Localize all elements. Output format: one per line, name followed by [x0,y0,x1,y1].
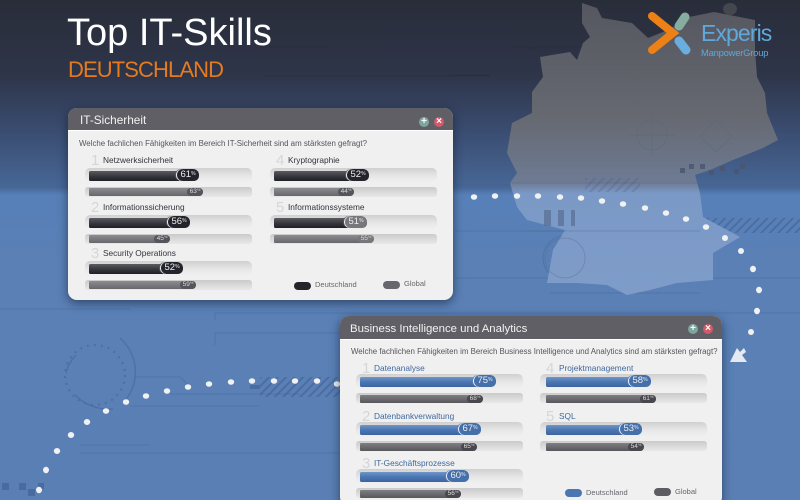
skill row 1: 68% [470,394,480,402]
question text: Welche fachlichen Fähigkeiten im Bereich IT-Sicherheit sind am stärksten gefragt? [79,139,367,148]
skill row 5: 54% [631,442,641,450]
panel heading [340,316,722,340]
skill row 5: 55% [361,234,371,242]
skill row 2: Datenbankverwaltung [374,411,454,421]
icon: plus button [688,324,698,334]
title: Top IT-Skills [67,12,272,54]
skill row 3: IT-Geschäftsprozesse [374,458,455,468]
skill row 4: Kryptographie [288,155,340,165]
skill row 2: Informationssicherung [103,202,185,212]
skill row 3: 52% [164,262,180,273]
skill row 4: Projektmanagement [559,363,633,373]
skill row 4: 58% [632,375,648,386]
question text: Welche fachlichen Fähigkeiten im Bereich Business Intelligence und Analytics sind am stärksten gefragt? [351,347,718,356]
panel heading: IT-Sicherheit [80,113,146,127]
skill row 2: 2 [362,408,370,425]
panel: IT-Sicherheit [68,108,453,300]
skill row 3: 3 [362,455,370,472]
panel: IT-Sicherheit: Global [404,279,426,288]
skill row 1: 63% [190,187,200,195]
skill row 2: 67% [462,423,478,434]
skill row 5 [540,408,707,451]
legend: Global [675,487,697,496]
logo: Experis ManpowerGroup: ManpowerGroup [701,47,768,58]
icon: plus button: + [690,323,696,334]
panel: Business Intelligence und Analytics [340,316,722,500]
skill row 5: 5 [546,408,554,425]
skill row 1: Netzwerksicherheit [103,155,173,165]
skill row 3: Security Operations [103,248,176,258]
skill row 2 [356,408,523,451]
skill row 1 [356,360,523,403]
skill row 4 [540,360,707,403]
icon: plus button: + [421,116,427,127]
icon: close button: × [436,116,442,127]
skill row 3: 3 [91,245,99,262]
dotted path with arrow [36,193,762,493]
logo: Experis ManpowerGroup [648,12,772,58]
skill row 5: 5 [276,199,284,216]
skill row 1: 61% [180,169,196,180]
icon: close button: × [705,323,711,334]
skill row 2 [85,199,252,244]
skill row 3: 56% [448,489,458,497]
icon: close button [434,117,444,127]
skill row 5: SQL [559,411,576,421]
skill row 5: Informationssysteme [288,202,365,212]
skill row 2: 56% [171,216,187,227]
skill row 4: 61% [643,394,653,402]
subtitle: DEUTSCHLAND [68,57,223,82]
skill row 4 [270,152,437,197]
skill row 4: 4 [546,360,554,377]
skill row 3 [85,245,252,290]
skill row 1: 1 [91,152,99,169]
skill row 5: 53% [623,423,639,434]
legend: Deutschland [586,488,628,497]
legend: Deutschland [315,280,357,289]
legend [565,487,697,497]
skill row 1: 1 [362,360,370,377]
skill row 2: 2 [91,199,99,216]
skill row 1: 75% [477,375,493,386]
skill row 4: 52% [350,169,366,180]
legend [294,279,426,290]
skill row 3 [356,455,523,498]
skill row 5: 51% [348,216,364,227]
icon: plus button [419,117,429,127]
map of Germany [507,3,795,295]
skill row 1 [85,152,252,197]
skill row 4: 4 [276,152,284,169]
skill row 2: 65% [464,442,474,450]
panel heading [68,108,453,131]
skill row 2: 45% [157,234,167,242]
skill row 3: 59% [183,280,193,288]
skill row 3: 60% [450,470,466,481]
panel heading: Business Intelligence und Analytics [350,323,527,335]
icon: close button [703,324,713,334]
logo: Experis ManpowerGroup: Experis [701,20,771,46]
skill row 1: Datenanalyse [374,363,425,373]
skill row 5 [270,199,437,244]
skill row 4: 44% [341,187,351,195]
